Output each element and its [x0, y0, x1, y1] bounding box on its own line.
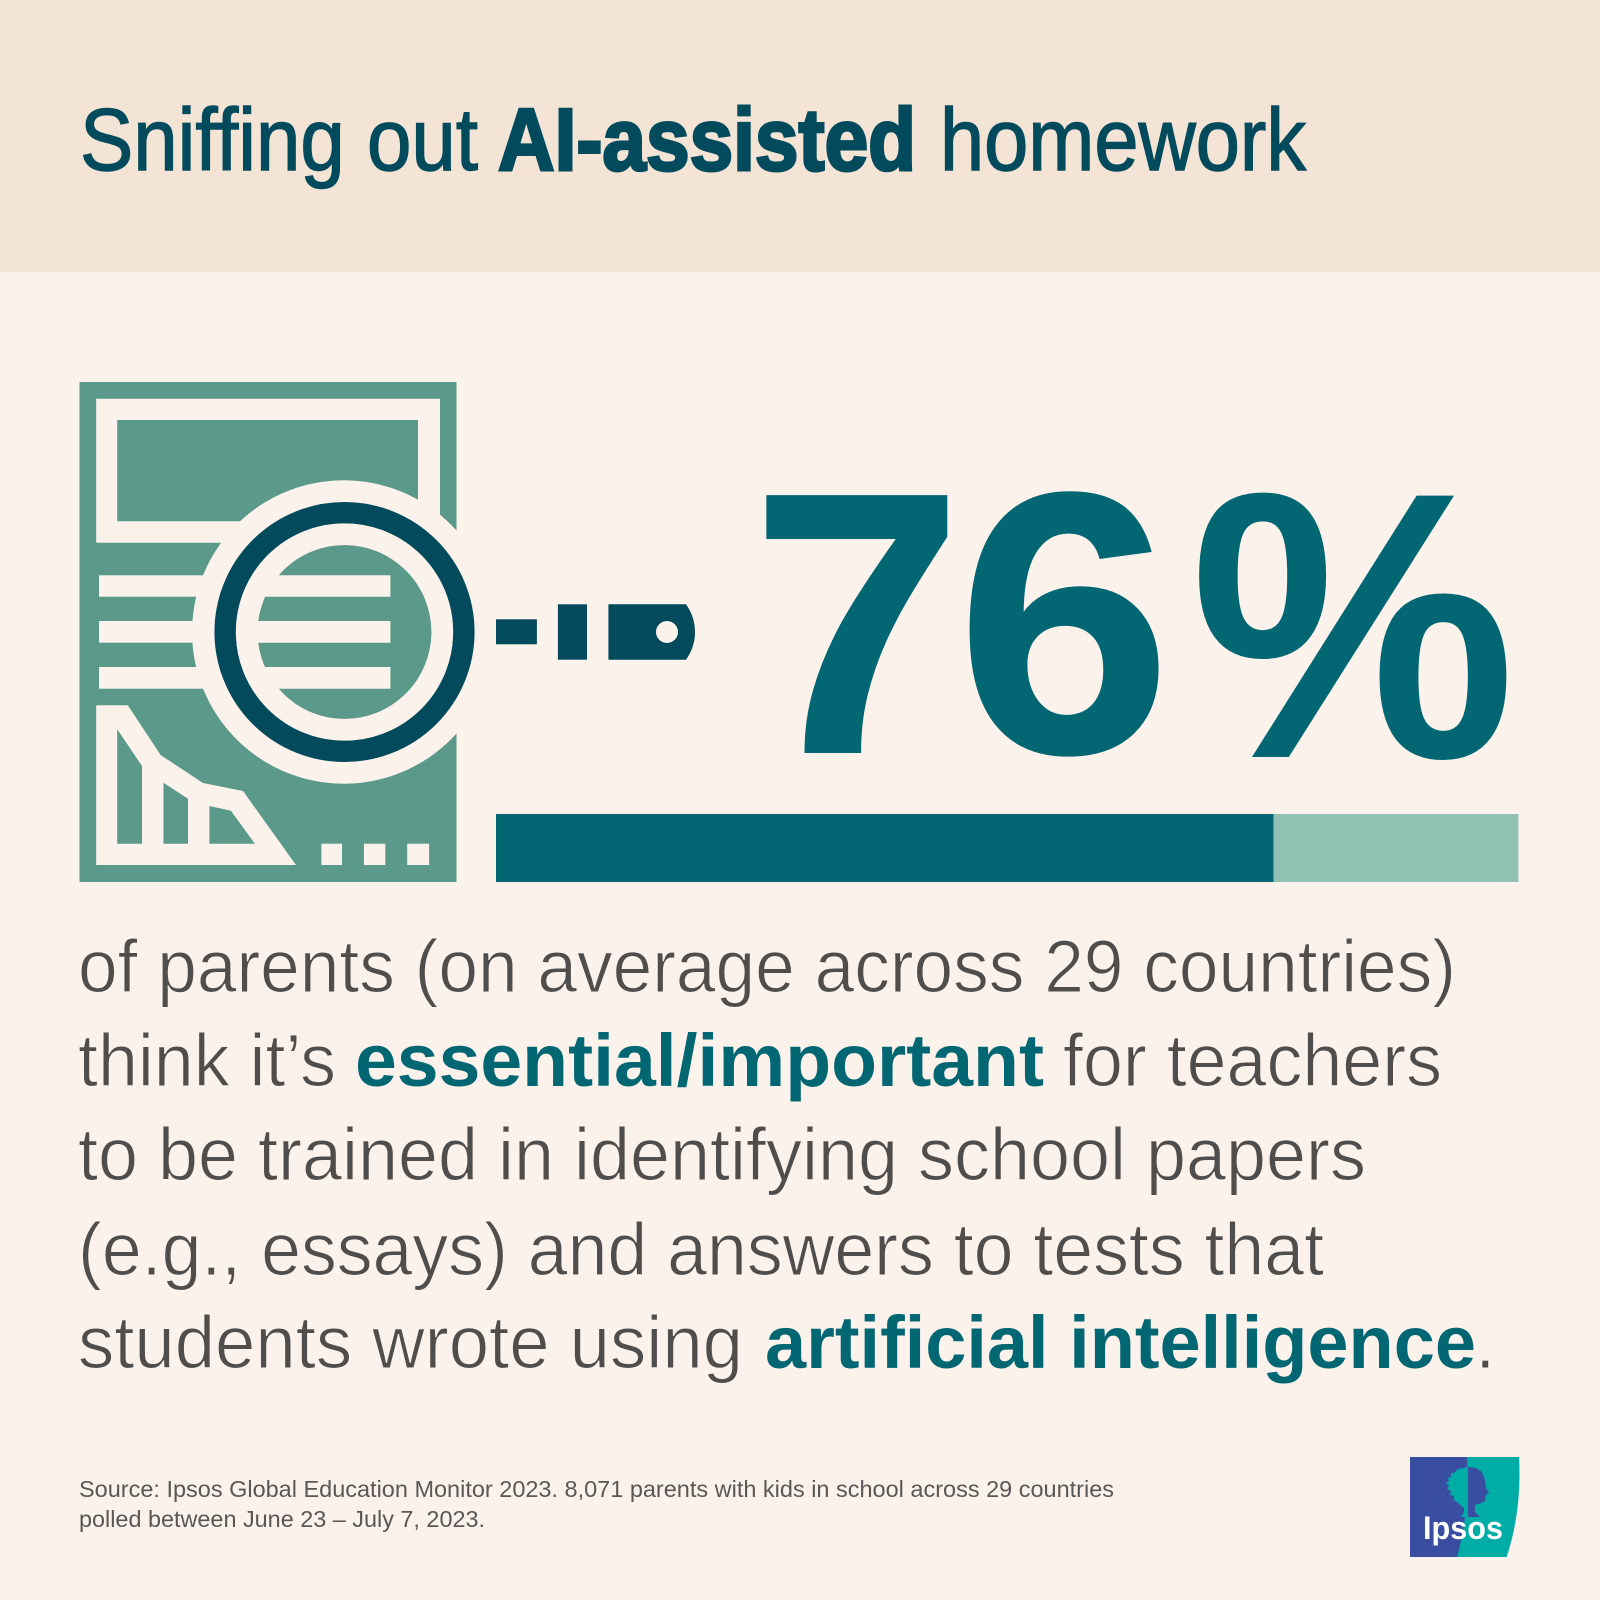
body text	[78, 925, 1496, 1384]
big number: 76%	[751, 413, 1516, 838]
source note	[79, 1476, 1114, 1532]
body text: essential/important	[355, 1019, 1044, 1102]
icon: document under magnifying glass	[80, 382, 695, 900]
big number: 76%: 6	[956, 415, 1172, 831]
title	[80, 90, 1307, 189]
body text: for teachers	[1063, 1019, 1442, 1102]
logo: Ipsos	[1410, 1457, 1519, 1557]
body text: students wrote using	[78, 1301, 743, 1384]
source note: Source: Ipsos Global Education Monitor 2023. 8,071 parents with kids in school across 29 countries	[79, 1476, 1114, 1502]
title: homework	[940, 90, 1307, 189]
big number: 76%: %	[1190, 413, 1516, 838]
source note: polled between June 23 – July 7, 2023.	[79, 1506, 485, 1532]
big number: 76%: 7	[751, 415, 963, 831]
body text: .	[1475, 1301, 1496, 1384]
header band	[0, 0, 1600, 272]
body text: artificial intelligence	[765, 1301, 1476, 1384]
title: AI-assisted	[498, 90, 916, 189]
body text: think it’s	[78, 1019, 336, 1102]
title: Sniffing out	[80, 90, 478, 189]
body text: of parents (on average across 29 countries)	[78, 925, 1456, 1008]
icon: magnifying glass	[192, 480, 695, 900]
body text: (e.g., essays) and answers to tests that	[78, 1208, 1324, 1291]
logo: Ipsos: Ipsos	[1423, 1510, 1503, 1546]
body text: to be trained in identifying school papers	[78, 1113, 1366, 1196]
progress bar: 76 percent	[496, 814, 1518, 882]
